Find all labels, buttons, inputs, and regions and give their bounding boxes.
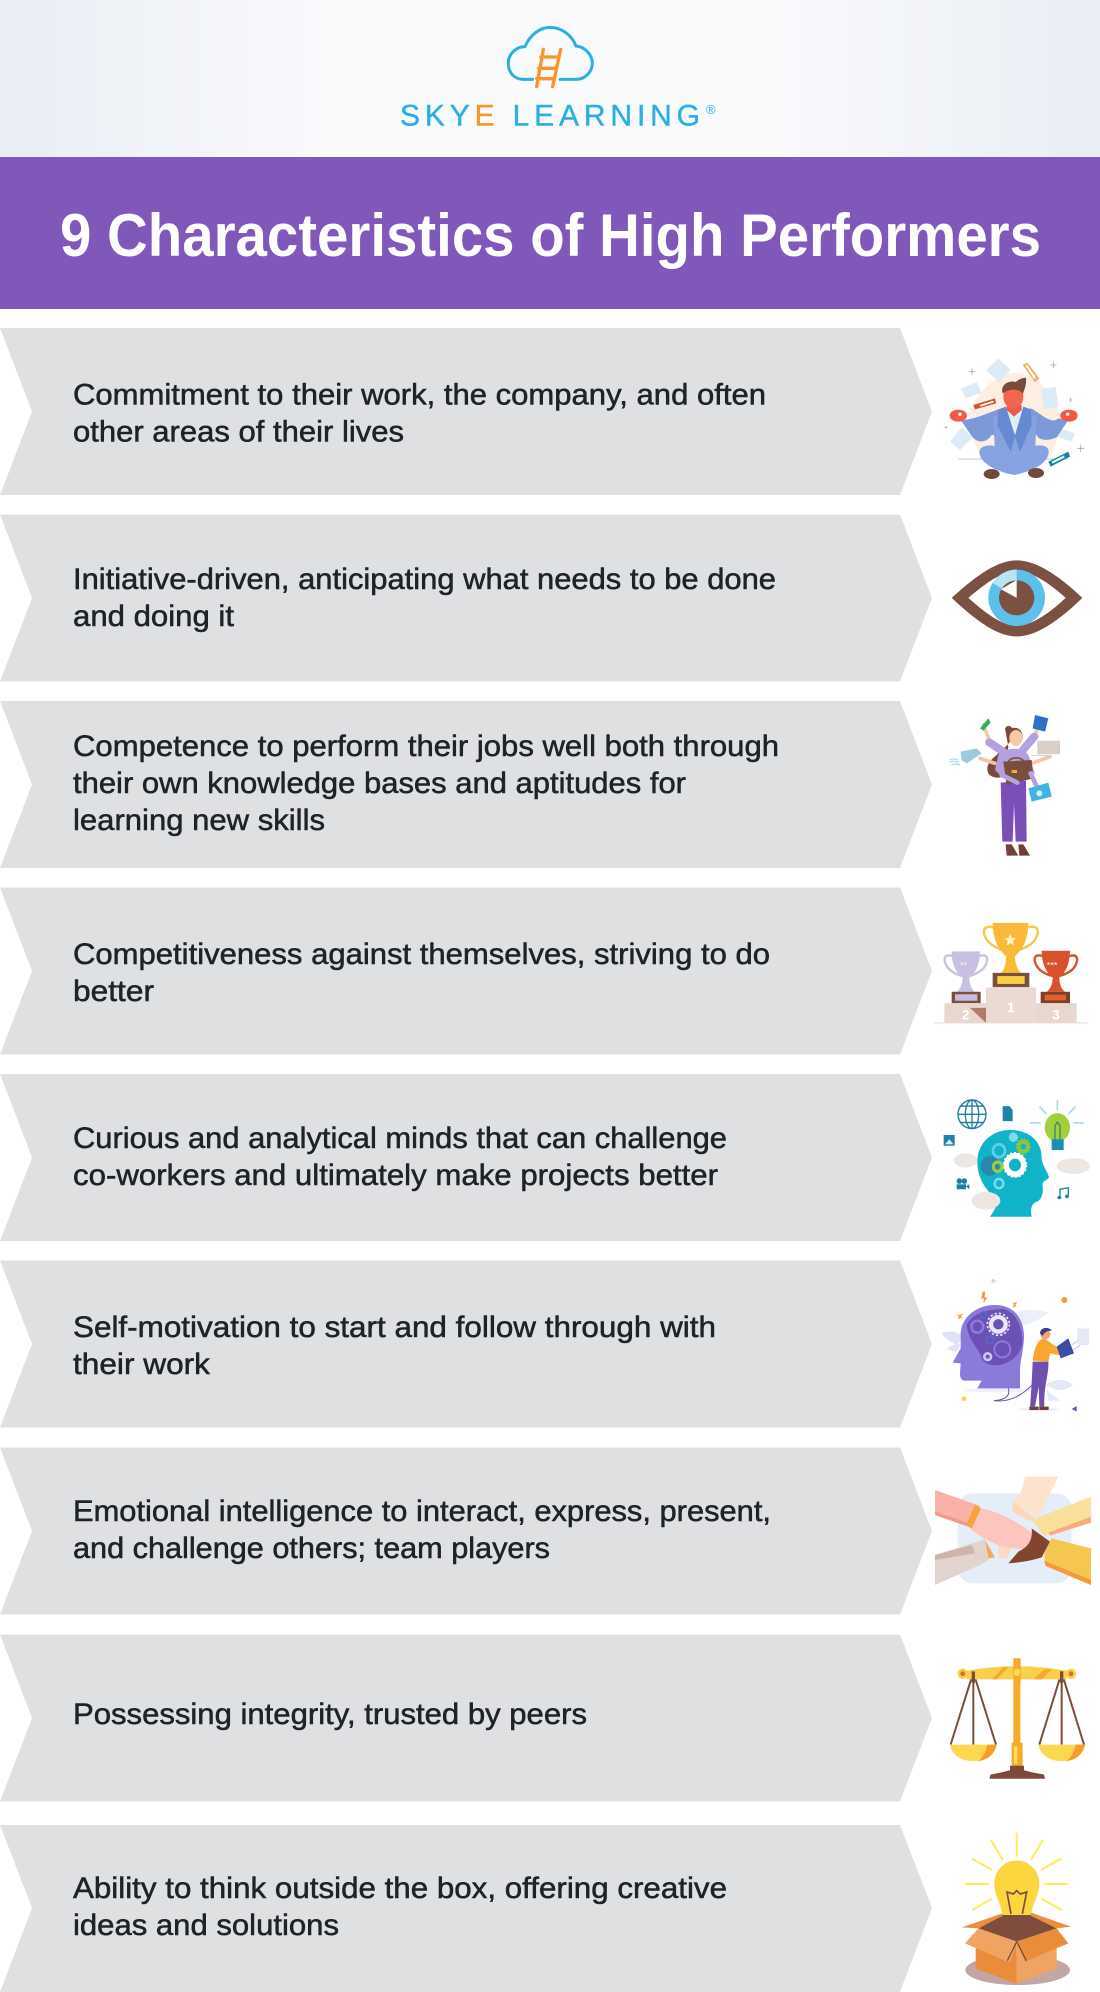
panel: emotional intelligence [0,1448,932,1614]
panel: integrity: Possessing integrity, trusted by peers [73,1698,587,1731]
panel: self-motivation: Self-motivation to start and follow through with [73,1311,716,1344]
panel: competitiveness: Competitiveness against themselves, striving to do [73,938,770,971]
panel: commitment: other areas of their lives [73,416,404,448]
icon: purple head and man with plug [942,1278,1089,1412]
icon: trophies on podium: 1 [1007,999,1015,1015]
panel: curiosity: Curious and analytical minds that can challenge [73,1122,727,1155]
icon: team hands together [935,1477,1091,1585]
panel: self-motivation [0,1260,932,1428]
panel: competitiveness: better [73,975,154,1008]
panel: self-motivation: their work [73,1348,211,1381]
icon: trophies on podium: ★★★ [1047,961,1058,966]
icon: trophies on podium [933,923,1088,1023]
panel: competence [0,701,932,868]
icon: multitasking woman [950,715,1060,856]
icon: meditating businessman [945,358,1084,479]
panel: curiosity: co-workers and ultimately make projects better [73,1159,718,1192]
panel: integrity [0,1634,932,1802]
panel: competence: their own knowledge bases and aptitudes for [73,767,686,800]
registered mark: ® [706,102,716,117]
icon: lightbulb in open box [962,1833,1071,1985]
panel: commitment [0,328,932,495]
panel: competence: Competence to perform their jobs well both through [73,730,779,763]
panel: emotional intelligence: and challenge others; team players [73,1532,550,1565]
icon: trophies on podium: 3 [1052,1006,1060,1022]
icon: trophies on podium: ★★ [960,961,967,966]
panel: creative thinking [0,1825,932,1992]
panel: curiosity [0,1074,932,1241]
icon: trophies on podium: 2 [962,1006,970,1022]
panel: creative thinking: ideas and solutions [73,1909,339,1942]
panel: competence: learning new skills [73,804,325,837]
panel: initiative [0,514,932,682]
panel: commitment: Commitment to their work, the company, and often [73,378,766,412]
panel: initiative: Initiative-driven, anticipating what needs to be done [73,563,776,596]
title band [0,157,1100,309]
panel: competitiveness [0,888,932,1054]
panel: emotional intelligence: Emotional intelligence to interact, express, present, [73,1495,771,1528]
panel: initiative: and doing it [73,600,235,633]
icon: balance scales [950,1658,1085,1779]
logo wordmark: SKYE LEARNING [400,100,700,132]
header logo area [0,0,1100,157]
panel: creative thinking: Ability to think outside the box, offering creative [73,1872,727,1905]
icon: eye [952,560,1082,636]
icon: head with gears [944,1100,1090,1217]
icon: cloud and ladder logo [508,27,592,87]
title: 9 Characteristics of High Performers [60,202,1041,269]
